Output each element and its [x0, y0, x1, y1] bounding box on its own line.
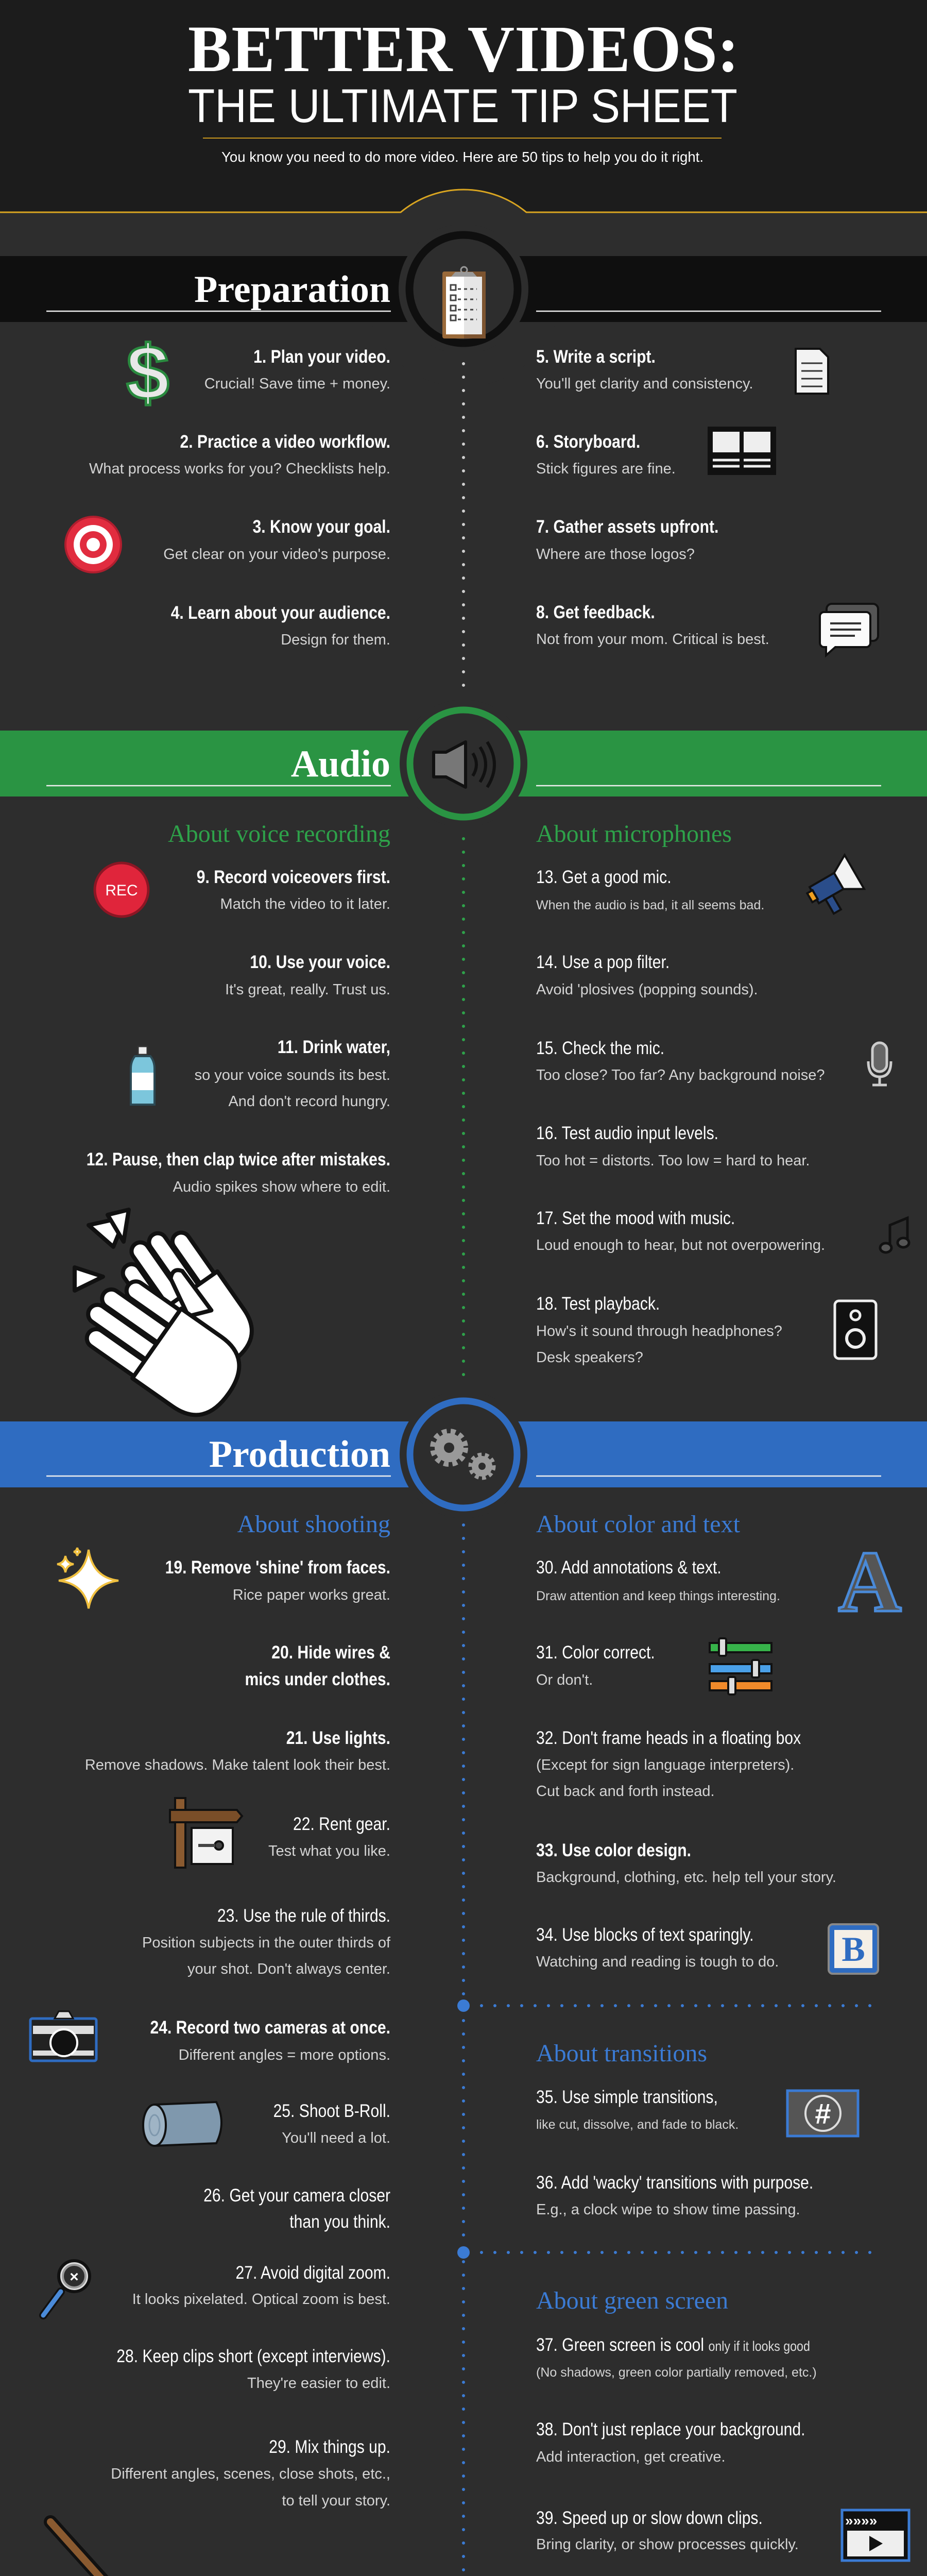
tip 8: 8. Get feedback. — [536, 602, 655, 622]
tip 1: Crucial! Save time + money. — [204, 376, 390, 392]
tip 20 — [245, 1642, 390, 1689]
tip 5: You'll get clarity and consistency. — [536, 376, 753, 392]
tip 29 — [111, 2436, 390, 2509]
dotted divider: production — [464, 1525, 881, 2576]
tip 4 — [171, 602, 390, 648]
tip 14 — [536, 952, 758, 998]
tip 32: (Except for sign language interpreters). — [536, 1757, 794, 1773]
title: BETTER VIDEOS: — [188, 12, 739, 86]
tip 23: 23. Use the rule of thirds. — [217, 1905, 390, 1926]
tip 24: Different angles = more options. — [179, 2047, 390, 2063]
icon: loudspeaker — [835, 1301, 876, 1359]
tip 18: Desk speakers? — [536, 1349, 643, 1366]
tip 7: 7. Gather assets upfront. — [536, 516, 718, 537]
icon: dollar: $ — [126, 329, 169, 416]
tip 2: 2. Practice a video workflow. — [180, 431, 390, 452]
icon: water bottle — [131, 1046, 154, 1105]
tip 32: 32. Don't frame heads in a floating box — [536, 1727, 801, 1748]
tip 12: 12. Pause, then clap twice after mistakes. — [87, 1149, 390, 1170]
tip 13: 13. Get a good mic. — [536, 867, 672, 887]
tip 22: 22. Rent gear. — [293, 1814, 390, 1834]
panel: preparation band — [0, 224, 927, 354]
tip 7: Where are those logos? — [536, 546, 695, 563]
icon: microphone — [868, 1043, 891, 1085]
tip 15: Too close? Too far? Any background noise? — [536, 1067, 825, 1083]
icon: speech bubbles — [820, 604, 878, 655]
tip 21: Remove shadows. Make talent look their best. — [85, 1757, 390, 1773]
tip 4: Design for them. — [281, 632, 390, 648]
tip 31: Or don't. — [536, 1672, 593, 1688]
icon: document — [796, 349, 828, 394]
tip 29: to tell your story. — [282, 2493, 390, 2509]
tip 2: What process works for you? Checklists help. — [89, 461, 390, 477]
tip 3: 3. Know your goal. — [253, 516, 390, 537]
icon: letter B block — [829, 1924, 878, 1974]
tip 28 — [116, 2346, 390, 2392]
tip 18: How's it sound through headphones? — [536, 1323, 782, 1340]
icon: transition hash — [787, 2091, 858, 2136]
icon: sparkle — [57, 1548, 118, 1608]
tip 10 — [225, 952, 390, 998]
panel: production band: Production — [209, 1433, 390, 1476]
tip 13: When the audio is bad, it all seems bad. — [536, 898, 764, 912]
tip 39: 39. Speed up or slow down clips. — [536, 2507, 763, 2528]
subheading: voice recording: About voice recording — [168, 820, 390, 848]
icon: letter B block: B — [842, 1929, 865, 1969]
tip 32 — [536, 1727, 801, 1800]
tip 4: 4. Learn about your audience. — [171, 602, 390, 623]
tip 30 — [536, 1557, 780, 1603]
tip 22 — [268, 1814, 390, 1859]
tip 12 — [87, 1149, 390, 1195]
tip 31 — [536, 1642, 655, 1688]
subheading: shooting: About shooting — [237, 1511, 390, 1538]
tip 32: Cut back and forth instead. — [536, 1783, 715, 1800]
tip 34 — [536, 1924, 779, 1970]
tip 1 — [204, 346, 390, 392]
tip 39 — [536, 2507, 799, 2553]
tip 21 — [85, 1727, 390, 1773]
tip 27: 27. Avoid digital zoom. — [236, 2262, 390, 2283]
subheading: color and text: About color and text — [536, 1511, 741, 1538]
tip 20: mics under clothes. — [245, 1669, 390, 1689]
icon: camera — [30, 2011, 96, 2061]
tip 29: 29. Mix things up. — [269, 2436, 390, 2457]
tip 11: 11. Drink water, — [278, 1037, 390, 1057]
icon: REC: REC — [105, 882, 138, 899]
tip 3: Get clear on your video's purpose. — [163, 546, 390, 563]
tip 23: your shot. Don't always center. — [187, 1961, 390, 1977]
tip 37: 37. Green screen is cool only if it looks good — [536, 2334, 810, 2355]
panel: audio band — [0, 700, 927, 827]
tip 18 — [536, 1293, 782, 1366]
tip 34: Watching and reading is tough to do. — [536, 1954, 779, 1970]
tip 17 — [536, 1208, 825, 1253]
icon: music note — [880, 1218, 909, 1252]
tip 37: (No shadows, green color partially removed, etc.) — [536, 2365, 817, 2380]
panel: production band — [0, 1391, 927, 1518]
icon: sliders — [710, 1638, 771, 1694]
tip 6 — [536, 431, 676, 477]
tip 28: They're easier to edit. — [247, 2375, 390, 2392]
dotted divider: preparation — [462, 364, 465, 689]
subheading: microphones: About microphones — [536, 820, 732, 848]
tip 19: Rice paper works great. — [233, 1587, 390, 1603]
panel: audio band: Audio — [291, 743, 390, 785]
icon: clapperboard: »»»» — [845, 2513, 877, 2529]
tip 26: 26. Get your camera closer — [203, 2185, 390, 2206]
tip 6: 6. Storyboard. — [536, 431, 640, 452]
tip 26 — [203, 2185, 390, 2232]
tip 25: You'll need a lot. — [282, 2130, 390, 2146]
tip 33: Background, clothing, etc. help tell your story. — [536, 1869, 836, 1886]
tip 34: 34. Use blocks of text sparingly. — [536, 1924, 753, 1945]
tip 14: 14. Use a pop filter. — [536, 952, 670, 972]
tip 30: Draw attention and keep things interesting. — [536, 1589, 780, 1603]
tip 14: Avoid 'plosives (popping sounds). — [536, 981, 758, 998]
tip 20: 20. Hide wires & — [271, 1642, 390, 1663]
tip 16: 16. Test audio input levels. — [536, 1123, 718, 1143]
tip 27: It looks pixelated. Optical zoom is best. — [132, 2291, 390, 2308]
tip 8 — [536, 602, 769, 648]
tip 35: like cut, dissolve, and fade to black. — [536, 2117, 739, 2132]
title — [188, 12, 739, 138]
tip 33: 33. Use color design. — [536, 1840, 691, 1860]
tip 29: Different angles, scenes, close shots, etc., — [111, 2466, 390, 2482]
tip 13 — [536, 867, 764, 912]
tip 36: E.g., a clock wipe to show time passing. — [536, 2201, 800, 2218]
icon: megaphone — [800, 855, 867, 920]
tip 11: And don't record hungry. — [228, 1093, 390, 1110]
tip 11: so your voice sounds its best. — [195, 1067, 390, 1083]
icon: transition hash: # — [815, 2097, 831, 2130]
tip 8: Not from your mom. Critical is best. — [536, 631, 769, 648]
tip 22: Test what you like. — [268, 1843, 390, 1859]
tip 36: 36. Add 'wacky' transitions with purpose. — [536, 2172, 813, 2193]
tip 24: 24. Record two cameras at once. — [150, 2017, 390, 2038]
tip 23 — [142, 1905, 391, 1977]
tip 11 — [195, 1037, 390, 1110]
icon: b-roll log — [143, 2102, 221, 2146]
subheading: green screen: About green screen — [536, 2287, 728, 2314]
tip 21: 21. Use lights. — [286, 1727, 390, 1748]
tip 5 — [536, 346, 753, 392]
tip 23: Position subjects in the outer thirds of — [142, 1935, 391, 1951]
tip 16 — [536, 1123, 810, 1169]
title: THE ULTIMATE TIP SHEET — [188, 80, 737, 132]
header background — [0, 0, 927, 387]
tip 35 — [536, 2087, 739, 2132]
tip 17: Loud enough to hear, but not overpowering. — [536, 1237, 825, 1253]
icon: storyboard — [708, 427, 776, 475]
tip 16: Too hot = distorts. Too low = hard to hear. — [536, 1153, 810, 1169]
tip 3 — [163, 516, 390, 563]
tip 9: Match the video to it later. — [220, 896, 390, 912]
icon: clapping hands — [71, 1210, 271, 1429]
tip 10: 10. Use your voice. — [250, 952, 390, 972]
icon: clipboard — [442, 267, 486, 338]
tip 25 — [273, 2100, 390, 2146]
subheading: transitions: About transitions — [536, 2040, 707, 2067]
tip 36 — [536, 2172, 813, 2218]
tip 19 — [165, 1557, 390, 1603]
icon: clapperboard — [842, 2510, 909, 2561]
tip 6: Stick figures are fine. — [536, 461, 676, 477]
tip 9 — [197, 867, 390, 912]
tip 12: Audio spikes show where to edit. — [173, 1179, 390, 1195]
tip 17: 17. Set the mood with music. — [536, 1208, 735, 1228]
tip 26: than you think. — [289, 2211, 390, 2232]
icon: letter A: A — [838, 1533, 901, 1630]
tip 9: 9. Record voiceovers first. — [197, 867, 390, 887]
icon: magnifier — [43, 2261, 90, 2315]
icon: gears — [434, 1432, 493, 1477]
icon: REC — [95, 863, 148, 917]
tip 33 — [536, 1840, 836, 1886]
tip 1: 1. Plan your video. — [253, 346, 390, 367]
tagline: You know you need to do more video. Here are 50 tips to help you do it right. — [221, 149, 703, 165]
icon: rent sign — [170, 1798, 242, 1868]
tip 25: 25. Shoot B-Roll. — [273, 2100, 390, 2121]
dotted divider: audio — [462, 839, 465, 1379]
tip 19: 19. Remove 'shine' from faces. — [165, 1557, 390, 1578]
tip 15: 15. Check the mic. — [536, 1038, 664, 1058]
tip 28: 28. Keep clips short (except interviews). — [116, 2346, 390, 2366]
tip 35: 35. Use simple transitions, — [536, 2087, 718, 2107]
tip 37 — [536, 2334, 817, 2380]
tip 30: 30. Add annotations & text. — [536, 1557, 722, 1578]
tip 2 — [89, 431, 390, 477]
icon: speaker — [434, 742, 494, 787]
icon: mixing bowl — [50, 2522, 410, 2576]
tip 7 — [536, 516, 718, 563]
tip 39: Bring clarity, or show processes quickly. — [536, 2536, 799, 2553]
tip 27 — [132, 2262, 390, 2308]
panel: preparation band: Preparation — [194, 268, 390, 311]
tip 38: Add interaction, get creative. — [536, 2449, 726, 2465]
tip 38: 38. Don't just replace your background. — [536, 2419, 805, 2439]
tip 24 — [150, 2017, 390, 2063]
tip 5: 5. Write a script. — [536, 346, 656, 367]
icon: target — [65, 517, 121, 572]
icon: magnifier: × — [70, 2268, 79, 2285]
tip 10: It's great, really. Trust us. — [225, 981, 390, 998]
tip 18: 18. Test playback. — [536, 1293, 660, 1314]
tip 31: 31. Color correct. — [536, 1642, 655, 1663]
tip 38 — [536, 2419, 805, 2465]
tip 15 — [536, 1038, 825, 1083]
